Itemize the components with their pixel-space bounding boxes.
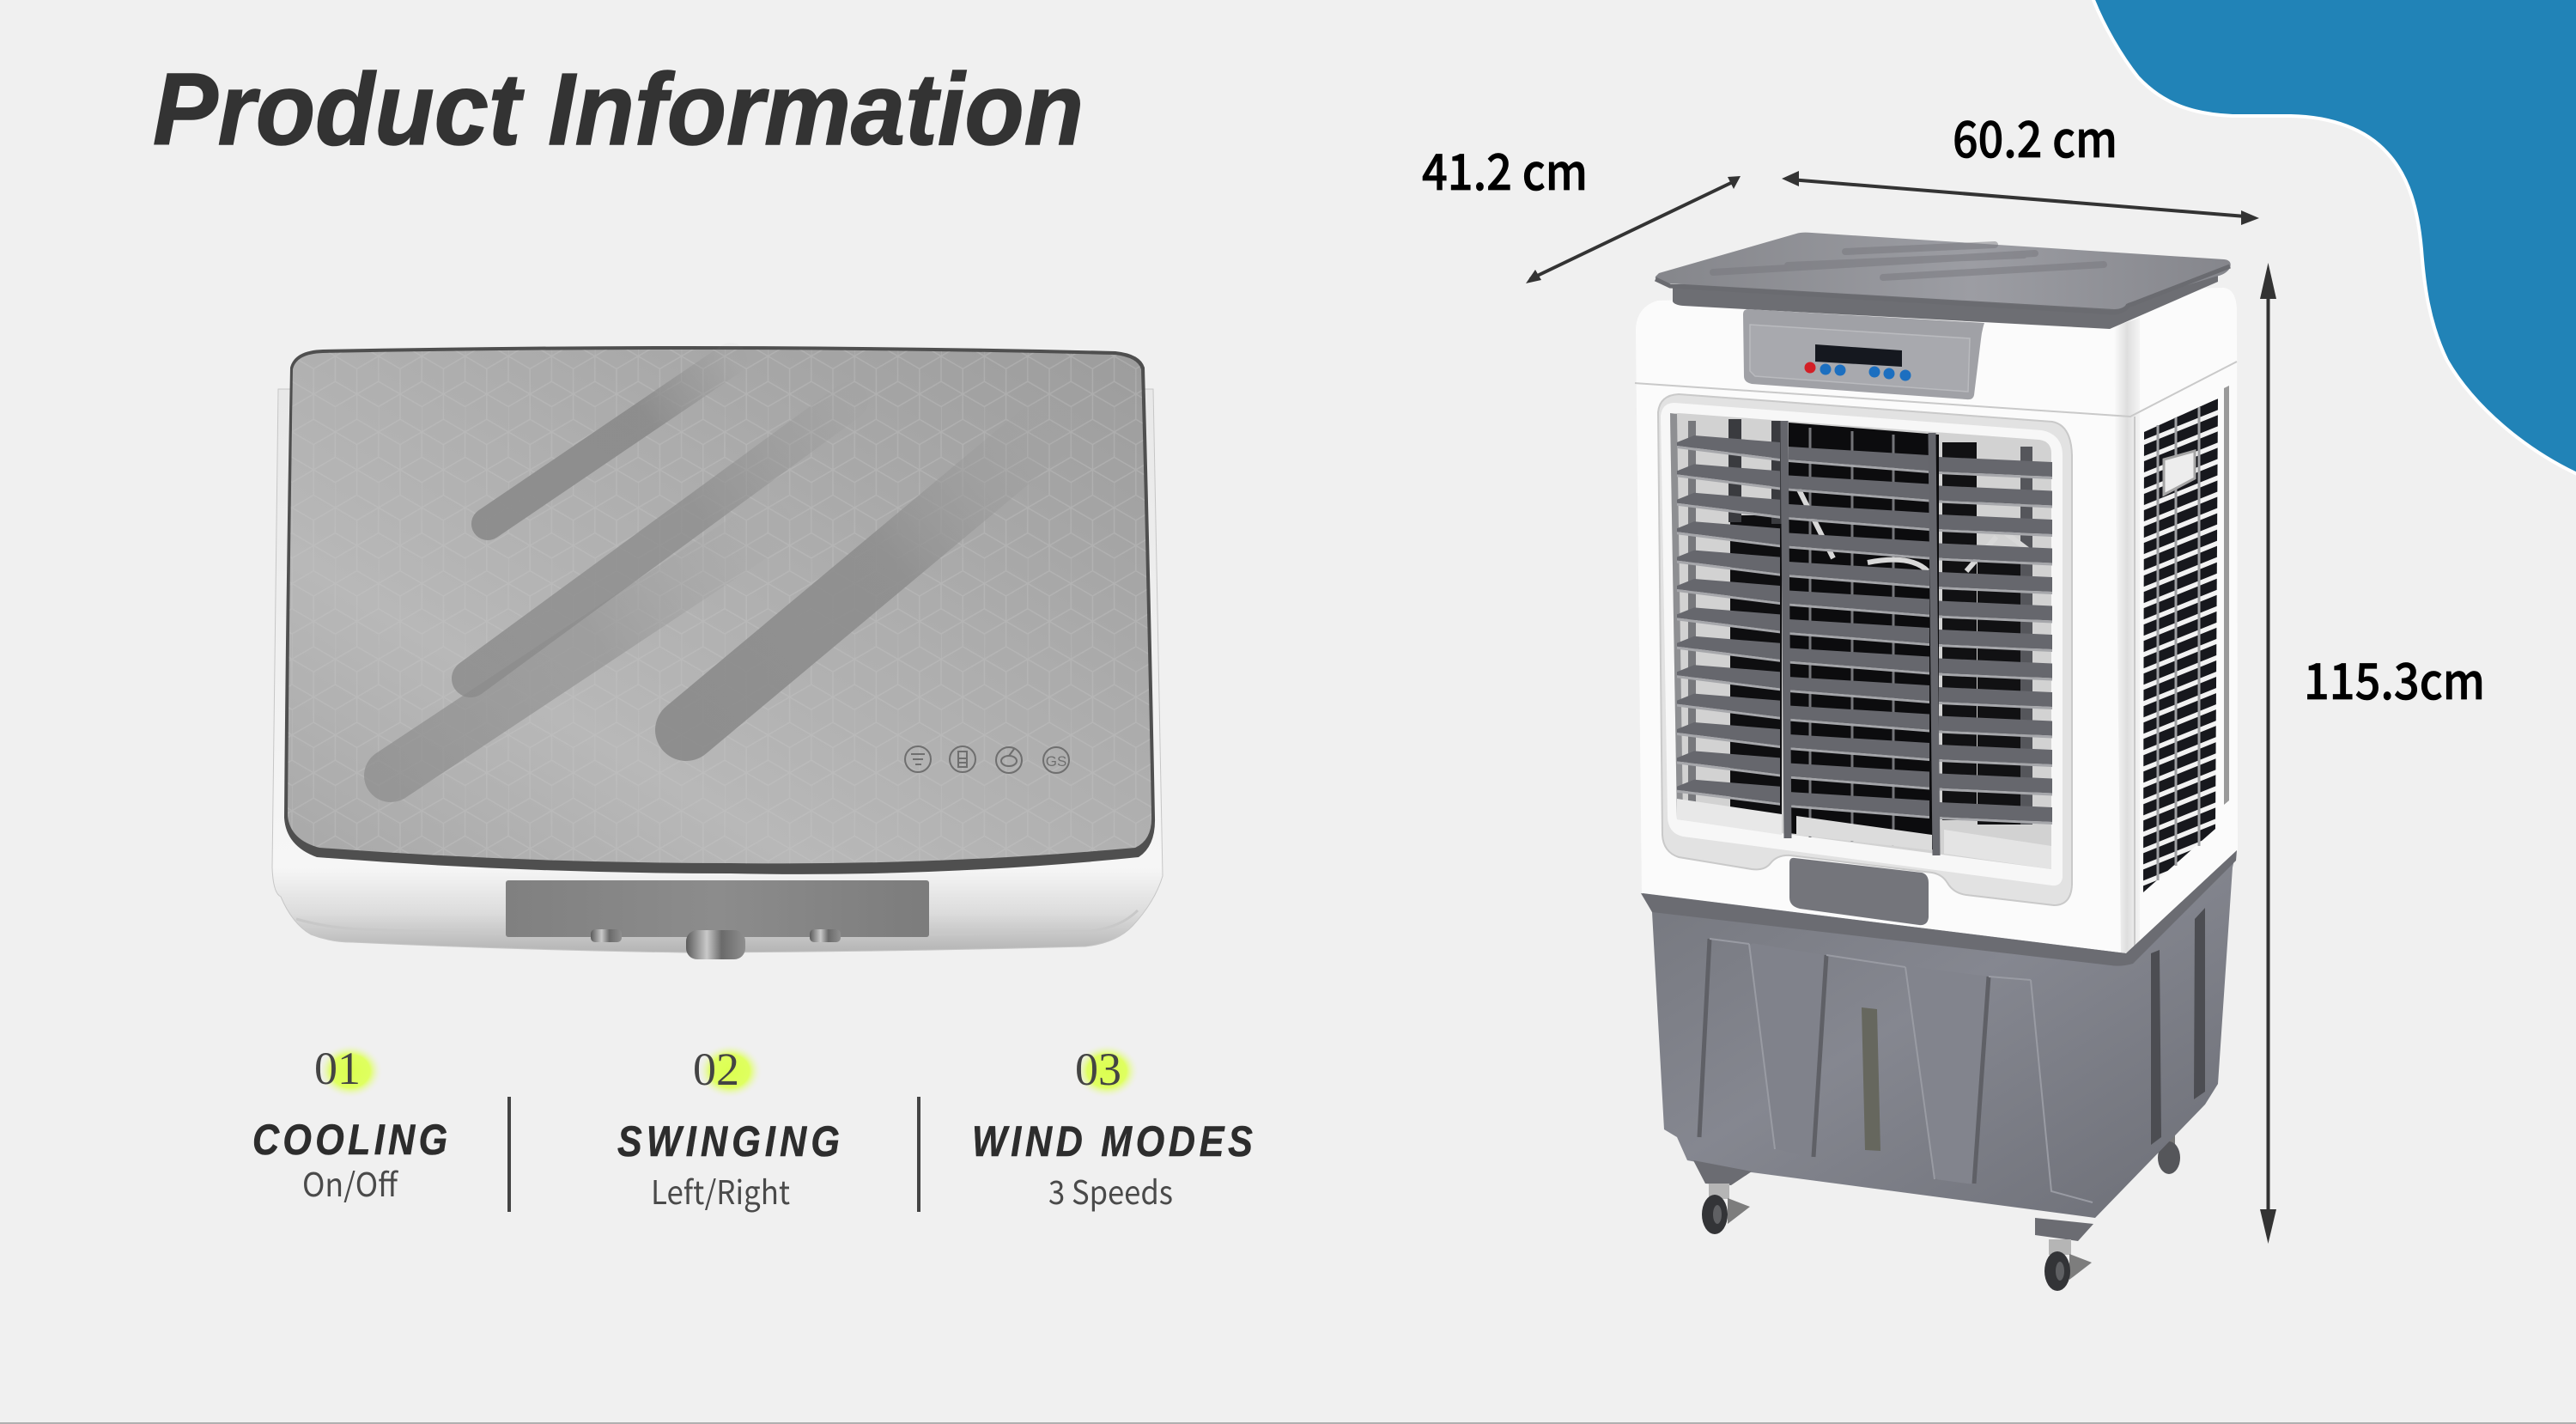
feature 03 glow <box>1074 1044 1139 1098</box>
white body <box>1636 288 2238 955</box>
certification icons <box>905 746 1069 773</box>
subtext: left/right: Left/Right <box>651 1166 790 1214</box>
heading: swinging: SWINGING <box>617 1117 840 1165</box>
heading: wind modes: WIND MODES <box>972 1117 1253 1165</box>
side strip <box>2224 386 2229 805</box>
grille frame <box>1658 394 2072 905</box>
divider 1 <box>507 1097 511 1212</box>
lid stripes <box>1713 245 2104 277</box>
small knob right <box>810 929 841 942</box>
unit body <box>272 389 1163 952</box>
grille interior blocks <box>1670 413 2039 850</box>
bottom edge line <box>0 1422 2576 1424</box>
depth arrow <box>1526 176 1741 283</box>
number 02: 02 <box>693 1044 739 1095</box>
side grille <box>2143 399 2218 892</box>
divider 2 <box>917 1097 920 1212</box>
grille window <box>1670 413 2051 869</box>
control panel <box>1743 309 1984 399</box>
buttons <box>1805 362 1815 373</box>
louvers column 3 <box>1939 457 2052 825</box>
tank raised panels <box>1753 947 1821 1153</box>
display <box>1815 344 1902 367</box>
number 03: 03 <box>1075 1044 1121 1095</box>
side grille ribs <box>2158 407 2199 880</box>
tank edges <box>1699 939 2093 1202</box>
subtext: 3 speeds: 3 Speeds <box>1048 1166 1173 1214</box>
louvers column 1 <box>1677 435 1780 806</box>
lid top <box>1656 233 2231 309</box>
lid <box>284 346 1155 874</box>
rear caster <box>2158 1125 2180 1174</box>
louvers column 2 <box>1789 447 1929 818</box>
tank lip <box>1641 850 2237 966</box>
subtext: on/off: On/Off <box>302 1159 398 1206</box>
dimension: depth: 41.2 cm <box>1422 132 1588 204</box>
side handle <box>2164 451 2195 495</box>
control strip <box>506 880 929 937</box>
grille dividers <box>1784 421 1936 855</box>
seam line <box>1635 362 2237 952</box>
dimension: height: 115.3cm <box>2304 642 2485 714</box>
height arrow <box>2260 263 2276 1244</box>
air cooler product photo <box>1635 233 2238 1291</box>
grille inner band <box>1661 403 2063 885</box>
feature 01 glow <box>318 1044 383 1098</box>
bottom of grille <box>1677 799 1782 835</box>
water gauge <box>1862 1007 1880 1151</box>
blue corner shape <box>2090 0 2576 478</box>
side tank recesses <box>2151 950 2161 1145</box>
small knob left <box>591 929 622 942</box>
body corner shade <box>2114 318 2140 955</box>
top-view product photo <box>272 346 1163 959</box>
left front caster <box>1702 1184 1750 1234</box>
number 01: 01 <box>314 1043 361 1094</box>
lid tray <box>1673 266 2218 329</box>
feature 02 glow <box>697 1044 762 1098</box>
dimension: width: 60.2 cm <box>1953 100 2117 172</box>
title: Product Information <box>153 52 1084 167</box>
right front caster <box>2044 1239 2092 1291</box>
right front foot <box>2035 1218 2093 1241</box>
width arrow <box>1782 171 2259 225</box>
drawer handle <box>1789 858 1929 925</box>
central knob <box>686 930 745 959</box>
certification icons: GS <box>1046 753 1066 770</box>
lid front edge <box>1656 266 2230 313</box>
lid stripes <box>391 359 1056 776</box>
heading: cooling: COOLING <box>252 1116 447 1164</box>
left front foot <box>1693 1160 1752 1185</box>
tank <box>1643 852 2236 1218</box>
